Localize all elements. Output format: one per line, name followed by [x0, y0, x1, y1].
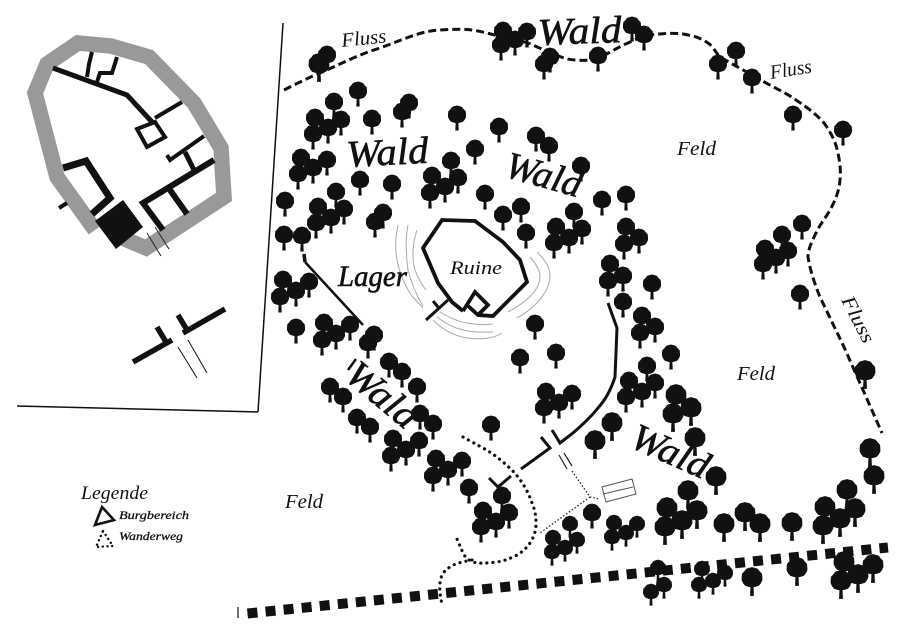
- keep tower: [95, 200, 143, 249]
- gate track lines: [559, 453, 572, 469]
- label: Wald north-east: Wald: [501, 144, 588, 206]
- label: Feld north: Feld: [676, 138, 717, 160]
- forest: north-west: [275, 82, 635, 258]
- footpath thin: [540, 471, 600, 533]
- label: Wald lower right: Wald: [624, 416, 717, 488]
- interior walls: [53, 52, 214, 230]
- forest: along river: [309, 16, 852, 310]
- legend text: Wanderweg: Wanderweg: [119, 529, 183, 543]
- railway: [238, 548, 888, 618]
- legend icon: hiking trail: [96, 531, 113, 547]
- inset: castle plan: [35, 43, 224, 256]
- ruin earthworks: [396, 225, 550, 339]
- label: Wald north-west: Wald: [345, 130, 430, 176]
- label: Ruine: Ruine: [449, 258, 502, 279]
- castle gate lines: [147, 227, 169, 256]
- river: [284, 29, 882, 433]
- label: Lager: Lager: [337, 260, 407, 293]
- legend text: Burgbereich: Burgbereich: [119, 508, 189, 522]
- label: Fluss east: Fluss: [836, 291, 879, 347]
- hut: [602, 479, 636, 502]
- forest: south of railway: [643, 551, 883, 606]
- ruin outline: [423, 220, 527, 320]
- legend title: Legende: [80, 483, 148, 504]
- label: Fluss left: Fluss: [339, 25, 387, 52]
- legend: [80, 483, 189, 547]
- inset frame lines: [17, 23, 283, 412]
- inset: gate detail: [133, 309, 225, 378]
- label: Feld west: Feld: [284, 491, 324, 513]
- label: Fluss right: Fluss: [767, 56, 813, 84]
- label: Wald top: Wald: [537, 9, 623, 54]
- forest: west: [271, 270, 518, 542]
- forest: centre and south-east: [511, 218, 884, 566]
- camp wall: [304, 254, 363, 370]
- east wall with gate: [489, 303, 617, 487]
- label: Feld east: Feld: [736, 363, 776, 385]
- legend icon: castle area: [95, 507, 114, 525]
- label: Wald lower left: Wald: [337, 353, 428, 438]
- hiking trail: [440, 437, 536, 605]
- gray curtain wall: [35, 43, 224, 248]
